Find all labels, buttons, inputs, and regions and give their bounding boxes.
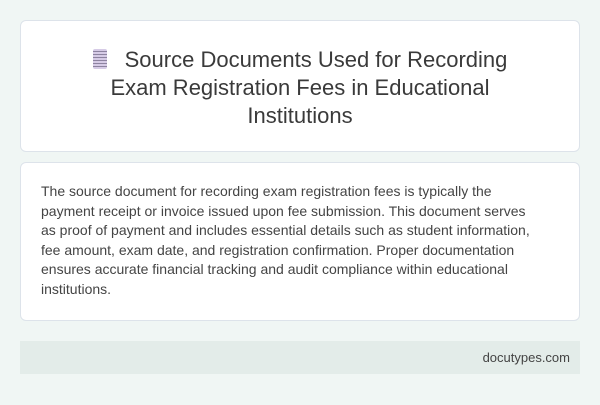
description text: [41, 183, 530, 296]
description text: fee amount, exam date, and registration confirmation. Proper documentation: [41, 242, 514, 258]
description text: institutions.: [41, 280, 111, 296]
title: Institutions: [247, 103, 353, 128]
footer text: docutypes.com: [483, 350, 570, 365]
title: Exam Registration Fees in Educational: [110, 75, 490, 100]
icon: receipt: [93, 49, 107, 69]
description text: ensures accurate financial tracking and audit compliance within educational: [41, 261, 508, 277]
footer: [20, 341, 580, 374]
description text: payment receipt or invoice issued upon fee submission. This document serves: [41, 202, 526, 218]
description text: The source document for recording exam registration fees is typically the: [41, 183, 492, 199]
title: [93, 47, 507, 128]
title card: [20, 20, 580, 152]
description panel: [20, 162, 580, 321]
title: Source Documents Used for Recording: [125, 47, 507, 72]
description text: as proof of payment and includes essential details such as student information,: [41, 222, 530, 238]
